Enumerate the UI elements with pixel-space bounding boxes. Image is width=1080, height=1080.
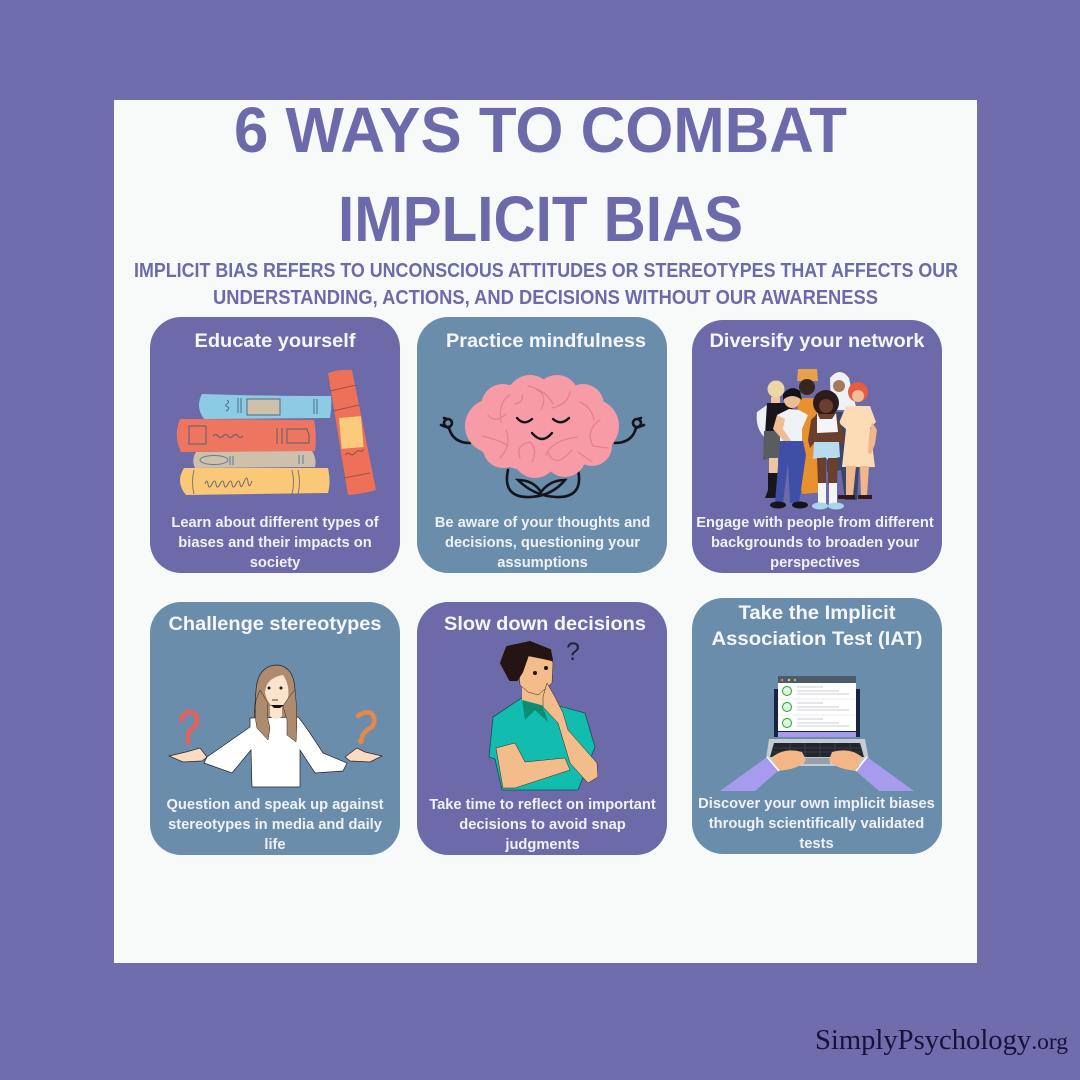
description: practice mindfulness [435, 515, 650, 571]
heading: take the implicit association test [712, 602, 922, 650]
description: practice mindfulness: Be aware of your thoughts and [435, 515, 650, 531]
blonde woman [768, 380, 784, 398]
icon: meditating brain [441, 375, 644, 497]
description: take the implicit association test [698, 796, 935, 852]
description: take the implicit association test: through scientifically validated [709, 816, 924, 832]
woman in orange back [797, 369, 818, 381]
panel: white content area [114, 100, 977, 963]
description: diversify your network: Engage with people from different [696, 515, 934, 531]
icon: woman shrugging with question marks [169, 665, 382, 787]
icon: stack of books [177, 370, 376, 495]
description: educate yourself [171, 515, 379, 571]
panel: practice mindfulness [417, 317, 667, 573]
hair back [254, 665, 296, 720]
heading: practice mindfulness: Practice mindfulness [446, 330, 646, 352]
hair front strands [255, 690, 270, 740]
panel: challenge stereotypes [150, 602, 400, 855]
description: practice mindfulness: assumptions [497, 555, 588, 571]
icon: laptop with checklist and hands [720, 676, 914, 791]
title: IMPLICIT BIAS [338, 183, 743, 255]
panel: educate yourself [150, 317, 400, 573]
description: educate yourself: biases and their impacts on [178, 535, 372, 551]
question mark red [181, 712, 197, 736]
heading: challenge stereotypes: Challenge stereotypes [168, 613, 382, 635]
panel: diversify your network [692, 320, 942, 573]
description: challenge stereotypes: Question and speak up against [166, 797, 384, 813]
description: slow down decisions [429, 797, 656, 853]
subtitle [134, 259, 958, 309]
icon: thinking man in teal polo [489, 638, 598, 790]
description: take the implicit association test: tests [799, 836, 834, 852]
description: slow down decisions: judgments [504, 837, 580, 853]
description: challenge stereotypes [166, 797, 384, 853]
heading: diversify your network: Diversify your network [710, 330, 925, 352]
title [234, 94, 847, 255]
heading: take the implicit association test: Take the Implicit [738, 602, 896, 624]
woman in centre [808, 414, 817, 448]
heading: take the implicit association test: Association Test (IAT) [712, 628, 922, 650]
subtitle: IMPLICIT BIAS REFERS TO UNCONSCIOUS ATTITUDES OR STEREOTYPES THAT AFFECTS OUR [134, 259, 958, 282]
hands [169, 748, 207, 762]
title: 6 WAYS TO COMBAT [234, 94, 847, 166]
heading: slow down decisions: Slow down decisions [444, 613, 646, 635]
woman in blue jeans [784, 392, 800, 408]
description: educate yourself: Learn about different types of [171, 515, 379, 531]
red-haired woman [848, 382, 868, 402]
torso and arms [204, 717, 347, 787]
subtitle: UNDERSTANDING, ACTIONS, AND DECISIONS WITHOUT OUR AWARENESS [213, 286, 878, 309]
description: challenge stereotypes: stereotypes in media and daily [168, 817, 383, 833]
question mark orange [358, 712, 374, 737]
panel: slow down decisions [417, 602, 667, 855]
icon: group of diverse people [757, 369, 877, 510]
footer: site name: SimplyPsychology.org [815, 1025, 1069, 1056]
description: practice mindfulness: decisions, questioning your [445, 535, 640, 551]
description: diversify your network [696, 515, 934, 571]
description: slow down decisions: Take time to reflect on important [429, 797, 656, 813]
description: diversify your network: backgrounds to broaden your [711, 535, 919, 551]
description: take the implicit association test: Discover your own implicit biases [698, 796, 935, 812]
description: diversify your network: perspectives [770, 555, 860, 571]
woman in hijab back [830, 372, 857, 410]
icon: thinking man in teal polo: ? [566, 638, 580, 666]
heading: educate yourself: Educate yourself [194, 330, 356, 352]
description: challenge stereotypes: life [264, 837, 286, 853]
description: educate yourself: society [250, 555, 301, 571]
description: slow down decisions: decisions to avoid snap [459, 817, 626, 833]
panel: take the implicit association test [692, 598, 942, 854]
